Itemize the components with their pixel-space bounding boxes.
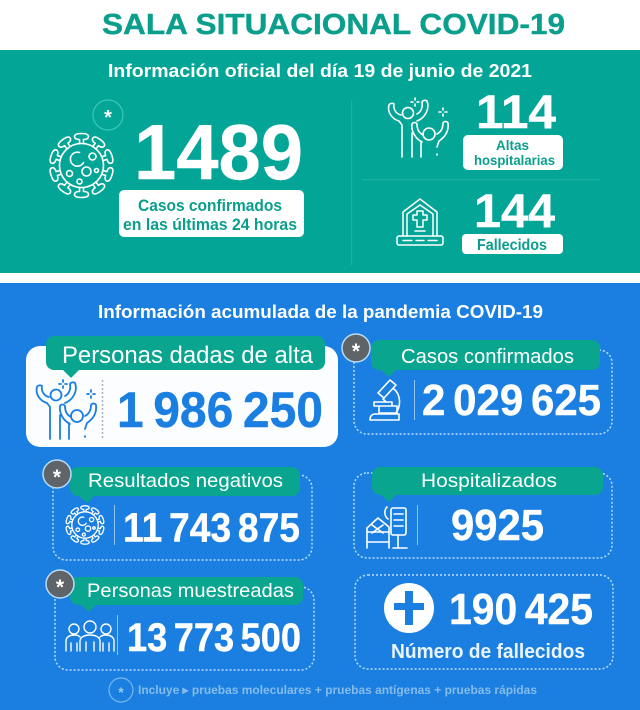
panel: cumulative information: [0, 283, 640, 710]
deaths label: [462, 234, 563, 254]
daily heading: Información oficial del día 19 de junio de 2021: [108, 60, 532, 81]
card: negative results: [43, 460, 312, 560]
daily confirmed number: 1489: [134, 108, 303, 196]
confirmed cases label: Casos confirmados: [138, 196, 282, 215]
icon: virus small: [65, 506, 105, 544]
icon: group of people: [66, 621, 114, 651]
card: number of deaths: [355, 575, 613, 669]
card: number of deaths: 190 425: [449, 585, 593, 634]
card: discharged people: Personas dadas de alta: [62, 342, 314, 369]
card: hospitalized: Hospitalizados: [421, 470, 557, 492]
panel: daily information: [0, 50, 640, 273]
icon: hospital bed: [367, 507, 407, 548]
card: sampled people: Personas muestreadas: [87, 580, 294, 602]
card: confirmed cases: Casos confirmados: [401, 346, 574, 368]
footnote: *: [118, 684, 124, 700]
card: hospitalized: 9925: [451, 501, 544, 550]
card: sampled people: 13 773 500: [127, 616, 301, 660]
footnote: Incluye ▸ pruebas moleculares + pruebas antígenas + pruebas rápidas: [138, 683, 537, 697]
card: negative results: *: [53, 466, 62, 489]
icon: tombstone: [397, 199, 443, 245]
discharges label: hospitalarias: [474, 152, 555, 168]
card: sampled people: [46, 570, 314, 670]
card: discharged people: [26, 336, 338, 447]
confirmed cases label: [119, 190, 304, 237]
icon: celebrating people: [389, 98, 448, 157]
asterisk badge: *: [104, 107, 112, 129]
confirmed cases label: en las últimas 24 horas: [123, 215, 297, 234]
card: sampled people: *: [56, 576, 65, 599]
icon: microscope: [370, 380, 400, 420]
discharges label: [463, 135, 563, 170]
cumulative heading: Información acumulada de la pandemia COVID-19: [98, 301, 543, 322]
card: discharged people: 1 986 250: [117, 382, 323, 438]
card: number of deaths: Número de fallecidos: [391, 640, 585, 663]
discharges number: 114: [476, 85, 556, 138]
card: negative results: Resultados negativos: [88, 470, 283, 492]
footnote: [109, 678, 537, 702]
deaths label: Fallecidos: [477, 237, 547, 254]
deaths number: 144: [474, 184, 555, 237]
asterisk badge: [93, 100, 123, 130]
card: confirmed cases: 2 029 625: [422, 376, 601, 425]
card: confirmed cases: [342, 334, 612, 434]
icon: virus: [49, 134, 114, 198]
card: hospitalized: [354, 467, 612, 558]
title: SALA SITUACIONAL COVID-19: [102, 9, 565, 41]
discharges label: Altas: [496, 137, 529, 153]
card: confirmed cases: *: [352, 340, 361, 363]
card: negative results: 11 743 875: [123, 504, 300, 550]
